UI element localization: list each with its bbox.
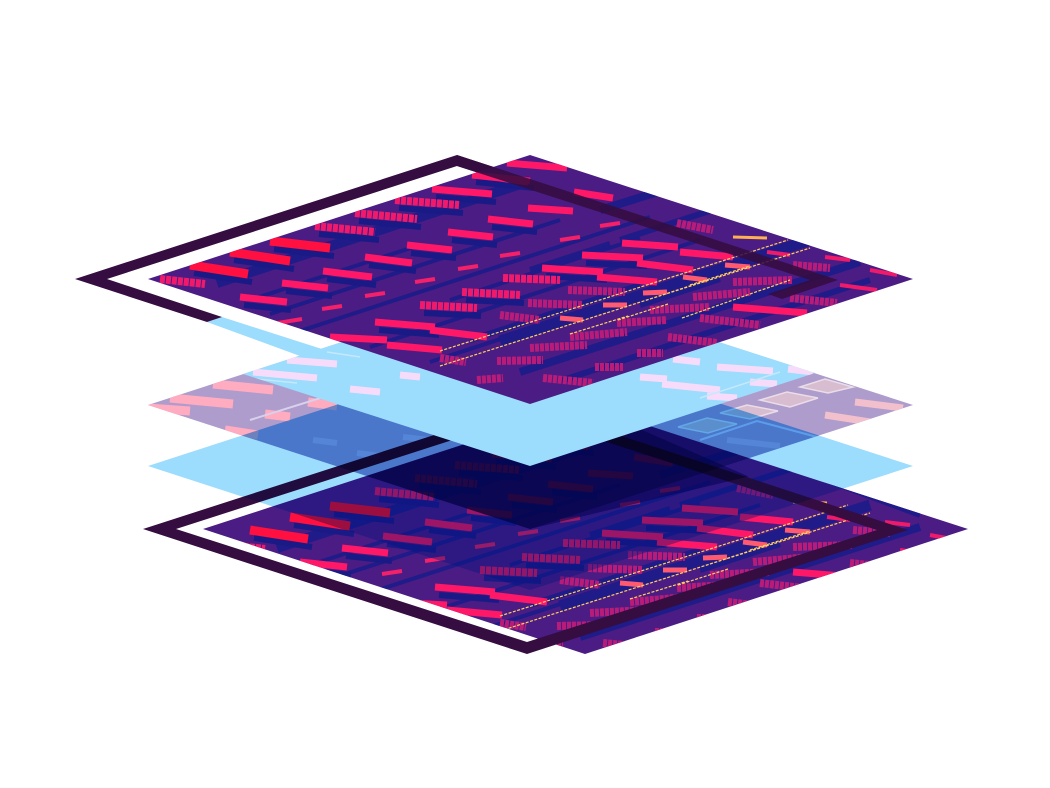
light blue plate: [148, 342, 913, 590]
dark overlap zone: [366, 405, 749, 529]
top frame base: [75, 155, 838, 322]
pale windows: [247, 352, 813, 398]
bottom image layer: [203, 426, 968, 654]
blue strip: [207, 317, 325, 356]
translucent image layer: [148, 342, 913, 529]
top image layer: [140, 140, 920, 410]
upper blue plate: [207, 317, 815, 466]
blue tint on translucent overlap: [242, 342, 819, 529]
translucent layer windows: [147, 379, 903, 456]
hatched window boxes: [678, 379, 853, 433]
bottom frame: [143, 405, 908, 654]
top frame overlay: [457, 155, 838, 299]
